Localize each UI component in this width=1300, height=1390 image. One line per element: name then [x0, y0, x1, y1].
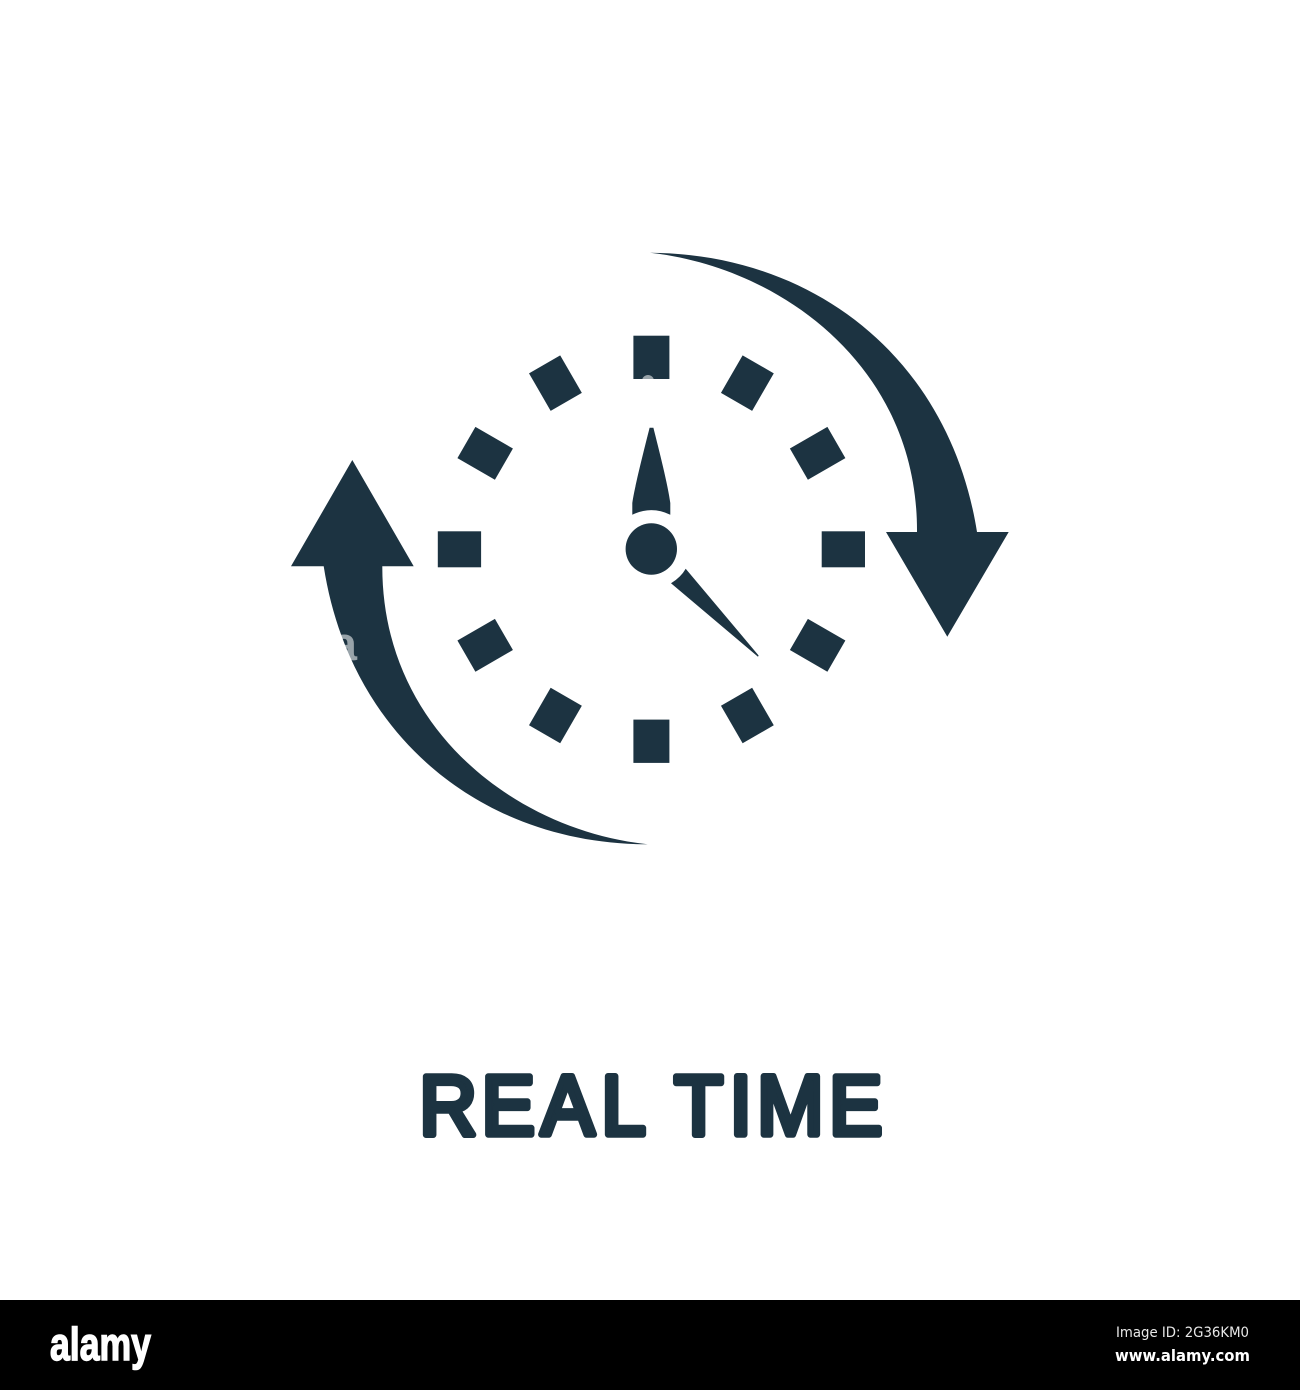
arrow: clockwise down [650, 253, 1009, 637]
clock tick marks [438, 336, 865, 763]
clock hour hand [632, 428, 670, 515]
footer bar [0, 1300, 1300, 1390]
footer url: www.alamy.com [1115, 1346, 1250, 1365]
clock centre [626, 523, 677, 575]
watermark fragments: a [331, 617, 358, 670]
footer image id: Image ID: 2G36KM0 [1116, 1325, 1249, 1341]
icon: clock with arrows [291, 253, 1009, 844]
arrow: clockwise up [291, 460, 648, 844]
clock minute hand [671, 569, 759, 657]
watermark fragments [331, 375, 654, 670]
heading: real time: REAL TIME [419, 1060, 882, 1153]
footer logo: alamy: alamy [50, 1318, 151, 1370]
